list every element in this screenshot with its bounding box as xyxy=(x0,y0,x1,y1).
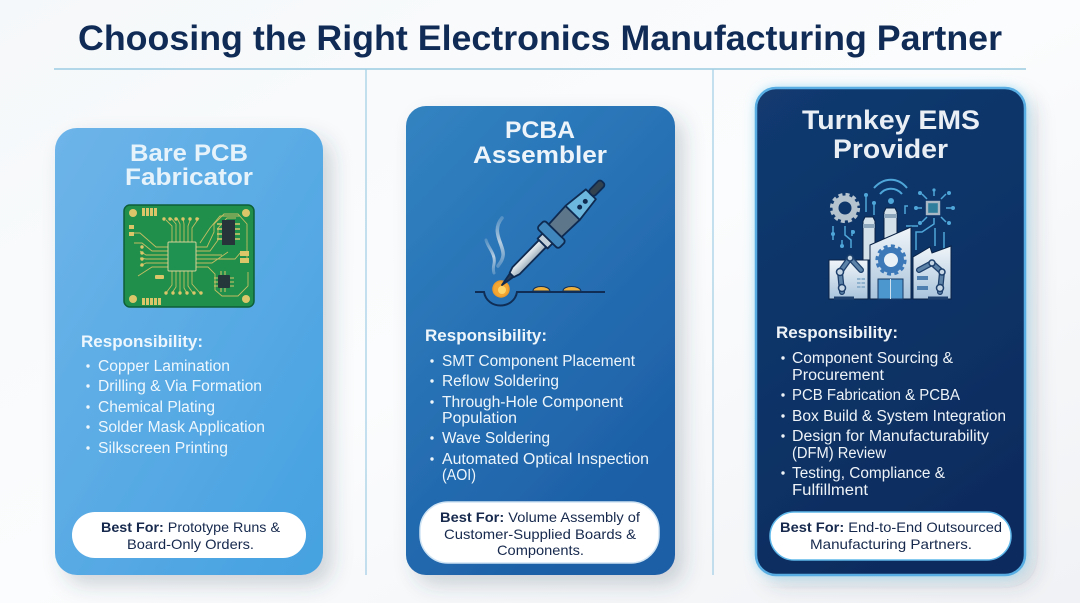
text block: responsibility list: Procurement xyxy=(792,367,885,384)
text block: responsibility list: PCB Fabrication & PCBA xyxy=(792,387,961,404)
text block: responsibility list: Responsibility: xyxy=(425,327,547,345)
text block: responsibility list: Silkscreen Printing xyxy=(98,440,228,457)
panel: turnkey EMS provider xyxy=(756,88,1025,575)
heading: PCBA Assembler xyxy=(473,117,607,169)
text block: responsibility list: Reflow Soldering xyxy=(442,373,559,390)
callout: best for prototype runs: Best For: Prototype Runs & xyxy=(101,519,281,535)
text block: responsibility list: Automated Optical Inspection xyxy=(442,451,649,468)
heading: Turnkey EMS Provider: Provider xyxy=(833,134,949,164)
icon: smart factory xyxy=(829,180,955,299)
text block: responsibility list: Through-Hole Component xyxy=(442,394,624,411)
text block: responsibility list: (AOI) xyxy=(442,467,476,484)
text block: responsibility list: Design for Manufacturability xyxy=(792,428,989,445)
text block: responsibility list: Drilling & Via Formation xyxy=(98,378,262,395)
callout: best for prototype runs: Board-Only Orders. xyxy=(127,536,254,552)
callout: best for prototype runs xyxy=(72,512,306,558)
text block: responsibility list xyxy=(425,327,649,484)
callout: best for end-to-end outsourced: Manufacturing Partners. xyxy=(810,536,972,552)
title: Choosing the Right Electronics Manufacturing Partner xyxy=(78,19,1002,58)
text block: responsibility list: Fulfillment xyxy=(792,482,869,499)
heading: PCBA Assembler: Assembler xyxy=(473,142,607,169)
panel: PCBA assembler xyxy=(406,106,675,575)
callout: best for volume assembly: Components. xyxy=(497,542,584,558)
icon: soldering iron xyxy=(475,172,613,306)
heading: Turnkey EMS Provider xyxy=(802,105,980,164)
callout: best for volume assembly xyxy=(420,502,659,563)
heading: Bare PCB Fabricator: Fabricator xyxy=(125,164,253,191)
text block: responsibility list: Responsibility: xyxy=(776,324,898,342)
text block: responsibility list: Wave Soldering xyxy=(442,430,550,447)
heading: PCBA Assembler: PCBA xyxy=(505,117,575,144)
panel: bare PCB fabricator xyxy=(55,128,323,575)
callout: best for end-to-end outsourced: Best For: End-to-End Outsourced xyxy=(780,519,1002,535)
text block: responsibility list: Chemical Plating xyxy=(98,399,215,416)
text block: responsibility list xyxy=(81,333,265,457)
text block: responsibility list: Box Build & System Integration xyxy=(792,408,1006,425)
heading: Turnkey EMS Provider: Turnkey EMS xyxy=(802,105,980,135)
callout: best for volume assembly: Customer-Supplied Boards & xyxy=(444,526,637,542)
text block: responsibility list: Copper Lamination xyxy=(98,358,230,375)
heading: Bare PCB Fabricator xyxy=(125,140,253,191)
text block: responsibility list: SMT Component Placement xyxy=(442,353,636,370)
text block: responsibility list: Component Sourcing & xyxy=(792,350,954,367)
text block: responsibility list: Testing, Compliance & xyxy=(792,465,946,482)
callout: best for volume assembly: Best For: Volume Assembly of xyxy=(440,509,640,525)
text block: responsibility list: Solder Mask Application xyxy=(98,419,265,436)
text block: responsibility list: (DFM) Review xyxy=(792,445,887,462)
text block: responsibility list xyxy=(776,324,1006,499)
callout: best for end-to-end outsourced xyxy=(770,512,1011,560)
icon: green circuit board xyxy=(124,205,254,307)
text block: responsibility list: Population xyxy=(442,410,517,427)
text block: responsibility list: Responsibility: xyxy=(81,333,203,351)
heading: Bare PCB Fabricator: Bare PCB xyxy=(130,140,248,167)
